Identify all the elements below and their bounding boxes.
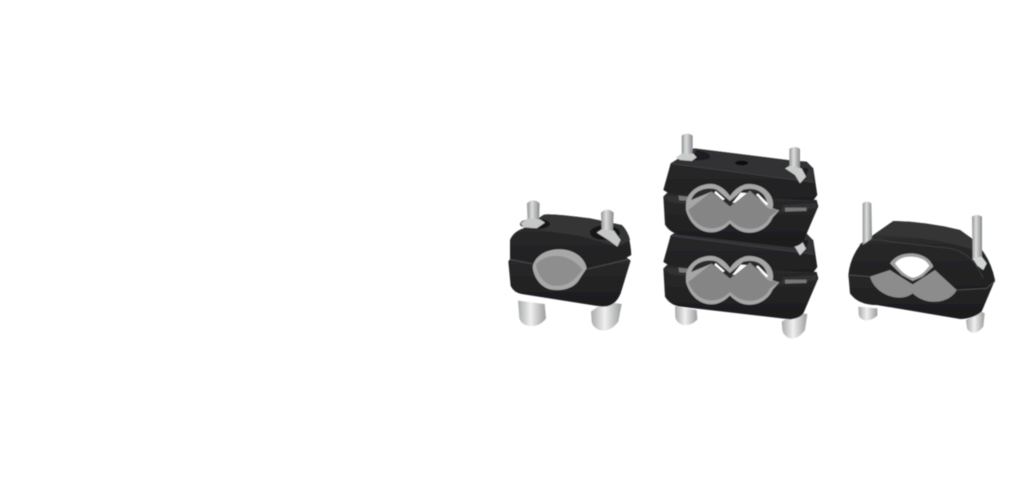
cable saddle [533, 249, 587, 290]
clamp: double-cable clamp with open centre, right [848, 202, 995, 333]
upper clamp body [510, 214, 631, 267]
recess around left bolt [520, 219, 550, 229]
front ridge [860, 240, 983, 278]
right washer [973, 257, 987, 270]
clamp stack: lower double clamp nuts [675, 306, 807, 338]
icon: right nut [591, 302, 622, 331]
clamps group with soft edges [508, 134, 995, 338]
recess around right bolt [590, 225, 620, 240]
right bolt [972, 215, 982, 260]
icon: right nut [966, 312, 985, 333]
icon: left nut [518, 301, 546, 326]
lower clamp body [848, 265, 995, 319]
icon: left nut [858, 307, 877, 320]
upper clamp body [848, 221, 995, 289]
seam line [849, 275, 995, 290]
left bolt [527, 200, 540, 223]
clamp stack: lower double clamp [663, 206, 818, 319]
icon: right nut [782, 313, 807, 338]
clamp stack: upper double clamp [663, 134, 818, 247]
grey cable saddles [870, 270, 957, 302]
seam line [510, 259, 628, 269]
left bolt [863, 202, 872, 245]
top face of upper body [523, 214, 630, 247]
white opening between cables [890, 253, 933, 281]
top face of upper body [873, 221, 983, 253]
right washer [597, 229, 621, 247]
left washer [521, 218, 545, 228]
lower clamp body [508, 253, 631, 307]
right bolt [601, 210, 614, 232]
clamp: single-cable clamp, left [508, 200, 631, 331]
cable saddle inner [536, 256, 583, 286]
icon: left nut [675, 306, 697, 325]
